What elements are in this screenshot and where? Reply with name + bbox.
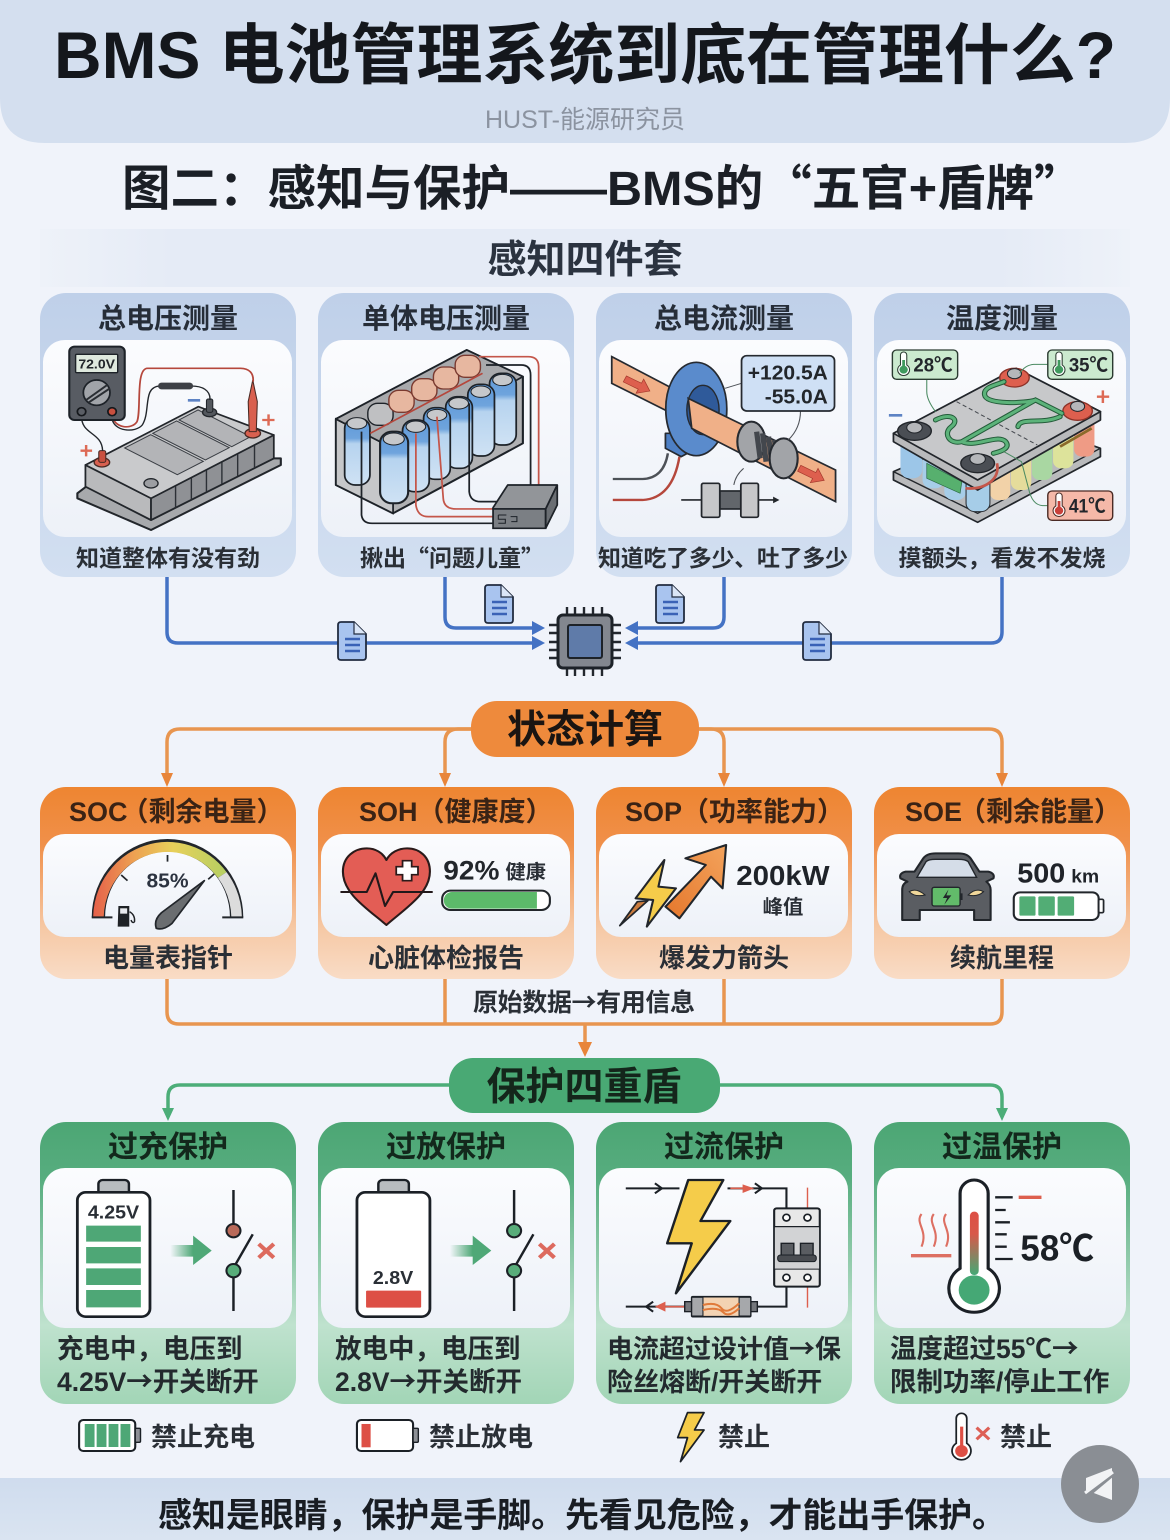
icon: full battery and open switch: 4.25V [88, 1203, 139, 1223]
icon: battery with temperature sensors: 35℃ [1069, 355, 1108, 377]
heading: SOC（剩余电量） [69, 797, 284, 827]
icon: power arrow: 200kW [736, 861, 831, 892]
header band [0, 0, 1170, 143]
caption: 知道吃了多少、吐了多少 [598, 545, 848, 571]
panel: total current [596, 293, 852, 577]
heading: 过流保护 [664, 1131, 784, 1164]
description: 2.8V→开关断开 [335, 1360, 522, 1399]
icon: thermometer 58 degrees: 58℃ [1020, 1228, 1094, 1268]
icon: battery with temperature sensors: 41℃ [1069, 496, 1106, 518]
icon: battery with temperature sensors: 28℃ [913, 355, 953, 377]
icon: data document 3 [656, 585, 684, 623]
heading pill: 状态计算: 状态计算 [507, 709, 663, 752]
panel: SOC [40, 787, 296, 979]
icon: BMS chip [549, 607, 621, 676]
footer band [0, 1478, 1170, 1540]
heading: 过充保护 [108, 1131, 228, 1164]
icon: data document 4 [803, 622, 831, 660]
heading: 过放保护 [386, 1131, 506, 1164]
icon: low battery and open switch [357, 1180, 554, 1317]
panel: overcurrent protection [596, 1122, 852, 1404]
arrows: sensors to chip [167, 577, 1002, 650]
description: 电流超过设计值→保 [607, 1329, 841, 1366]
icon: thermometer 58 degrees [911, 1180, 1094, 1312]
icon: full battery and open switch [77, 1180, 274, 1317]
icon: SOC gauge [92, 845, 243, 929]
description: 险丝熔断/开关断开 [607, 1367, 822, 1397]
icon: power arrow: 峰值 [763, 897, 803, 918]
icon: car and range: 500 [1017, 858, 1065, 888]
description: 温度超过55℃→ [890, 1327, 1078, 1366]
panel: SOH [318, 787, 574, 979]
icon: small thermometer with cross [952, 1413, 989, 1460]
heading: SOP（功率能力） [625, 797, 844, 827]
icon: current sensor ring on busbar: -55.0A [765, 386, 828, 408]
label: 禁止: 禁止 [1000, 1422, 1052, 1452]
arrows: state calculation to cards [161, 729, 1008, 787]
icon: heart health report: 健康 [505, 861, 546, 884]
heading: 总电压测量 [98, 303, 238, 334]
icon: current sensor ring on busbar: +120.5A [748, 362, 828, 384]
icon: car and range: km [1071, 866, 1099, 886]
label: 禁止放电: 禁止放电 [429, 1422, 533, 1452]
icon: small lightning [678, 1413, 704, 1462]
panel: total voltage [40, 293, 296, 577]
heading: 单体电压测量 [362, 303, 530, 334]
icon: current sensor ring on busbar [612, 356, 836, 517]
caption: 爆发力箭头 [659, 943, 789, 973]
description: 4.25V→开关断开 [57, 1360, 259, 1399]
label: 禁止: 禁止 [718, 1422, 770, 1452]
panel: SOP [596, 787, 852, 979]
arrows: state cards merge to protection [167, 979, 1002, 1057]
caption: 知道整体有没有劲 [76, 545, 260, 571]
caption: 电量表指针 [103, 943, 233, 973]
panel: over-discharge protection [318, 1122, 574, 1404]
caption: 摸额头，看发不发烧 [898, 545, 1106, 571]
section band: sensing [40, 229, 1130, 287]
heading: SOE（剩余能量） [905, 797, 1121, 827]
panel: SOE [874, 787, 1130, 979]
author credit: HUST-能源研究员 [485, 106, 685, 134]
arrows: protection shield to cards [162, 1085, 1008, 1121]
footer statement: 感知是眼睛，保护是手脚。先看见危险，才能出手保护。 [158, 1497, 1006, 1535]
icon: mute button overlay [1061, 1445, 1139, 1523]
heading: SOH（健康度） [359, 797, 553, 827]
caption: 续航里程 [950, 943, 1054, 973]
description: 放电中，电压到 [335, 1334, 520, 1364]
heading pill: 状态计算 [471, 701, 699, 757]
icon: power arrow [620, 845, 831, 927]
heading pill: 保护四重盾: 保护四重盾 [486, 1066, 682, 1109]
heading: 过温保护 [942, 1131, 1062, 1164]
subtitle: 图二：感知与保护——BMS的“五官+盾牌” [122, 149, 1083, 219]
icon: heart health report: 92% [443, 855, 499, 885]
icon: battery cells with sense wires [336, 350, 557, 528]
description: 充电中，电压到 [57, 1334, 242, 1364]
description: 限制功率/停止工作 [890, 1367, 1109, 1397]
caption: 揪出“问题儿童” [360, 539, 544, 573]
heading pill: 保护四重盾 [449, 1058, 720, 1113]
icon: multimeter and battery [69, 347, 281, 530]
icon: data document 1 [338, 622, 366, 660]
icon: low battery and open switch: 2.8V [373, 1268, 413, 1289]
caption: 心脏体检报告 [368, 943, 524, 973]
panel: over-temperature protection [874, 1122, 1130, 1404]
icon: SOC gauge: 85% [146, 870, 189, 893]
icon: heart health report [340, 848, 550, 925]
label: 禁止充电: 禁止充电 [151, 1422, 255, 1452]
section heading: 感知四件套: 感知四件套 [487, 239, 683, 282]
icon: discharge forbidden battery [357, 1420, 418, 1451]
icon: battery with temperature sensors [889, 350, 1113, 522]
icon: lightning, breaker and fuse [626, 1180, 820, 1317]
text: raw data to useful info: 原始数据→有用信息 [473, 983, 695, 1019]
heading: 总电流测量 [654, 303, 794, 334]
heading: 温度测量 [946, 303, 1058, 334]
main title: BMS 电池管理系统到底在管理什么? [54, 18, 1116, 92]
panel: temperature [874, 293, 1130, 577]
panel: cell voltage [318, 293, 574, 577]
icon: data document 2 [485, 585, 513, 623]
icon: car and range [900, 853, 1104, 920]
icon: multimeter and battery: 72.0V [78, 357, 116, 372]
panel: overcharge protection [40, 1122, 296, 1404]
icon: charge forbidden battery [79, 1420, 141, 1451]
